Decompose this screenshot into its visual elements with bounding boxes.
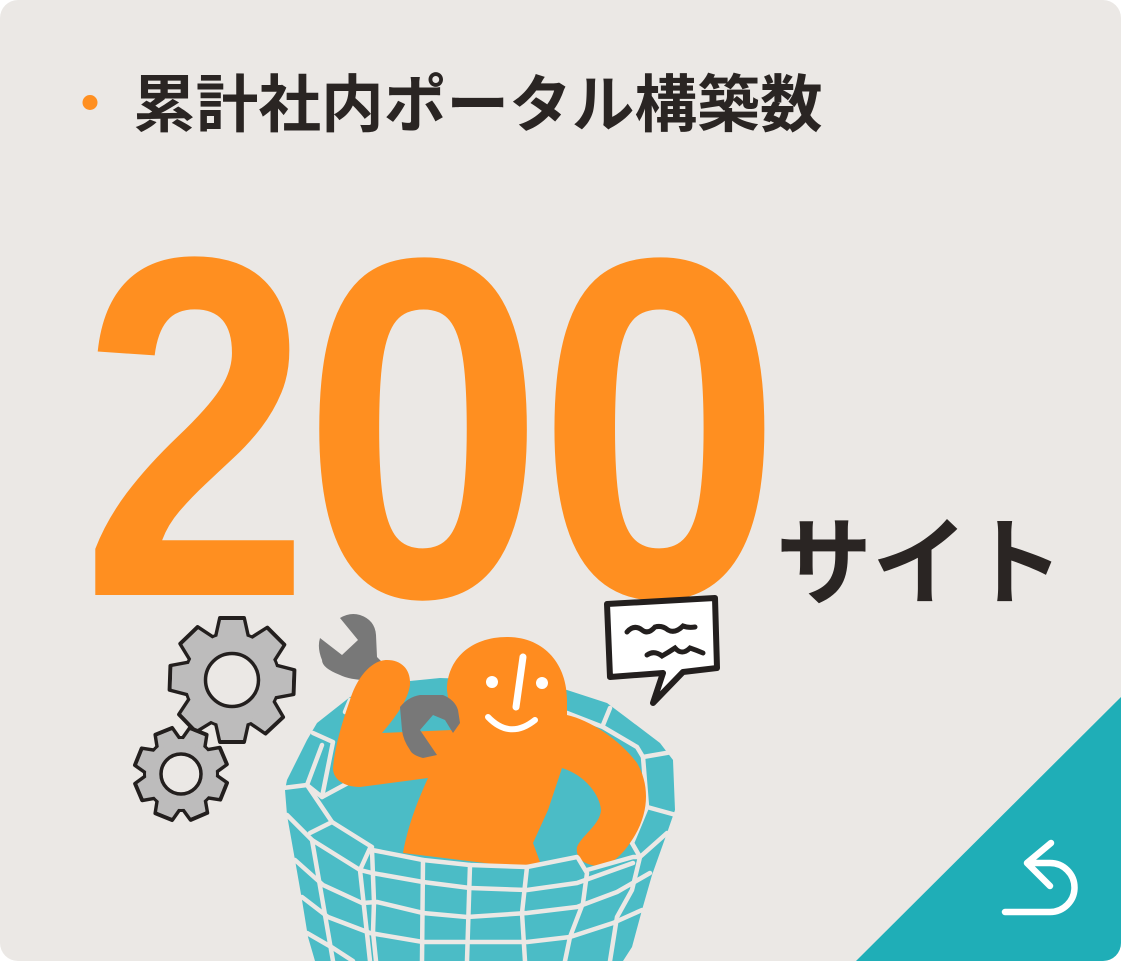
basket front grid (295, 833, 667, 961)
title: 累計社内ポータル構築数 (133, 70, 823, 140)
speech bubble (607, 598, 717, 703)
big number 200: 0 (302, 157, 545, 699)
wrench lower (400, 695, 460, 758)
big number 200 (81, 157, 782, 700)
face (486, 657, 548, 729)
basket back and body (285, 678, 675, 961)
person (319, 614, 646, 868)
big number 200: 0 (537, 158, 782, 700)
back corner button (856, 697, 1121, 961)
basket rim cell lines (283, 700, 676, 857)
wrench upper (319, 614, 392, 680)
unit label: サイト (776, 511, 1064, 618)
icon: return arrow (1005, 843, 1074, 912)
big number 200: 2 (81, 158, 310, 698)
bullet dot (82, 95, 98, 110)
body and arms (333, 637, 646, 868)
icon: large gear (169, 618, 295, 742)
icon: small gear (134, 727, 228, 821)
